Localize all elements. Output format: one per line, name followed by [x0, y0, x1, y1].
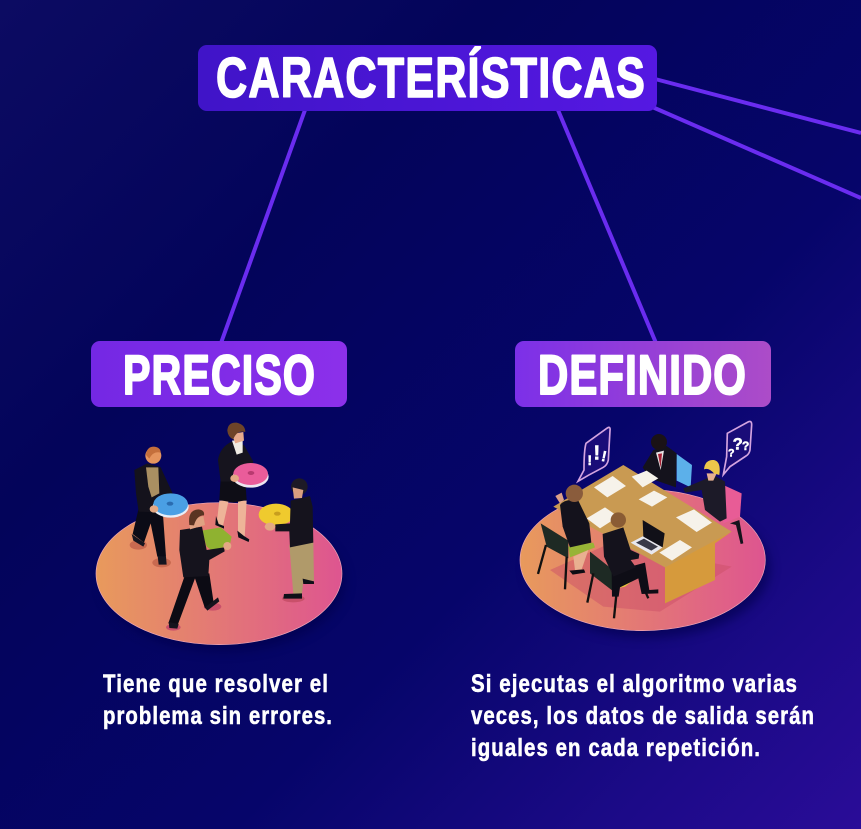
speech bubble: question marks: ?	[742, 439, 749, 453]
text: preciso description: problema sin errores.	[103, 702, 333, 730]
icon: yellow gear	[259, 504, 293, 526]
text: definido description: iguales en cada repetición.	[471, 734, 761, 762]
text: preciso description	[103, 670, 333, 730]
text: preciso description: Tiene que resolver el	[103, 670, 329, 698]
person: man at back with blue screen	[643, 434, 692, 487]
laptop	[631, 520, 665, 555]
title: CARACTERÍSTICAS	[216, 46, 646, 110]
illustration: team with gears	[96, 423, 345, 652]
speech bubble: exclamation marks: !	[600, 449, 608, 466]
person: man in front	[587, 512, 658, 618]
person: woman with pink gear	[215, 423, 269, 542]
papers	[587, 471, 712, 561]
text: definido description: Si ejecutas el algoritmo varias	[471, 670, 798, 698]
person: man with yellow gear	[259, 478, 314, 602]
speech bubble: question marks: ?	[728, 448, 734, 460]
platform disc	[96, 503, 342, 645]
speech bubble: exclamation marks: !	[593, 441, 600, 464]
illustration: meeting around a table	[520, 421, 770, 638]
person: man with green gear	[166, 509, 232, 631]
person: woman with green skirt	[538, 485, 595, 589]
icon: blue gear	[153, 493, 189, 518]
person: blonde woman	[683, 460, 727, 522]
connector lines	[221, 79, 861, 343]
icon: pink gear	[233, 463, 269, 488]
platform disc	[520, 489, 765, 631]
person: man with blue gear	[130, 447, 189, 567]
icon: green gear	[202, 527, 232, 551]
heading: definido: DEFINIDO	[538, 343, 747, 406]
speech bubble: question marks	[723, 421, 752, 475]
speech bubble: exclamation marks: !	[587, 452, 592, 468]
speech bubble: exclamation marks	[578, 427, 610, 481]
table	[553, 465, 732, 603]
text: definido description	[471, 670, 815, 762]
heading: preciso: PRECISO	[123, 343, 316, 406]
pink chair	[723, 485, 743, 544]
speech bubble: question marks: ?	[733, 434, 743, 453]
floor shadow	[550, 543, 732, 612]
